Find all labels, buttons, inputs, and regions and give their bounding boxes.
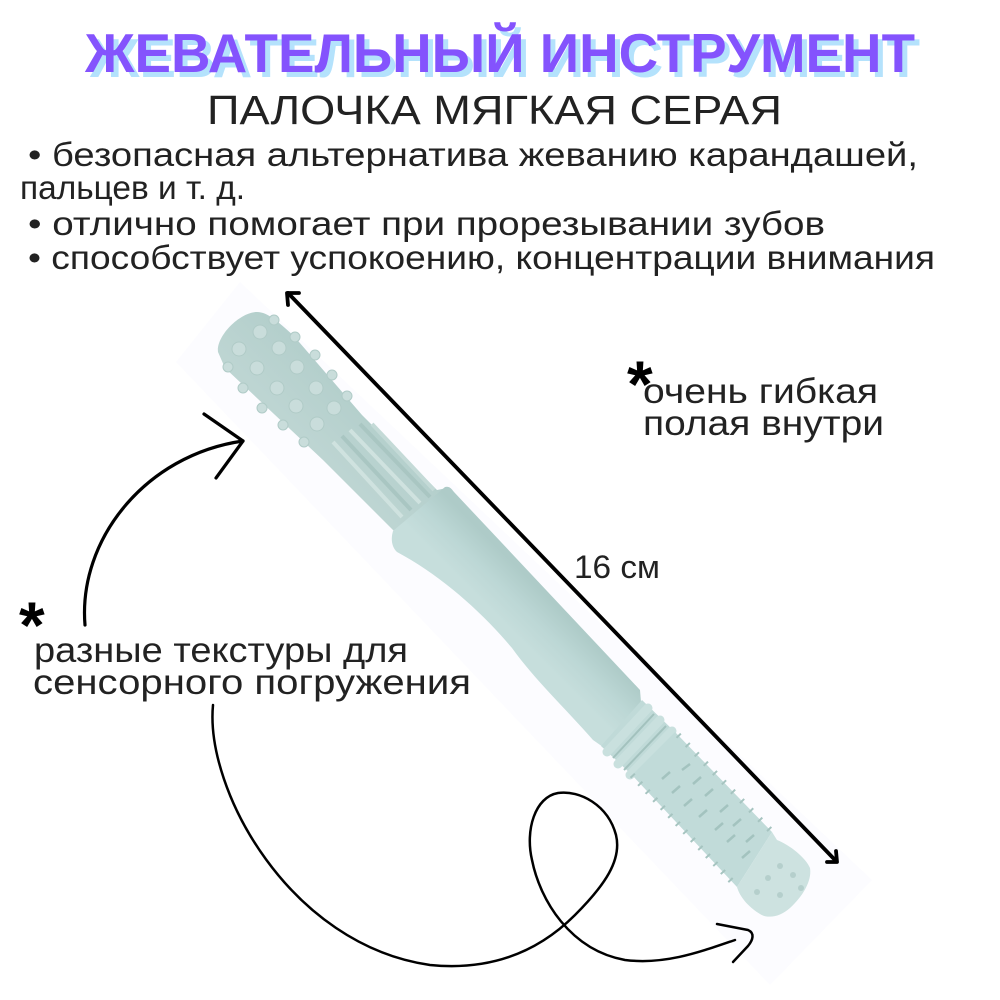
stick: bumpy section xyxy=(632,732,775,887)
text block: benefits: • отлично помогает при прорезывании зубов xyxy=(28,205,825,242)
arrow: curved to head xyxy=(84,414,243,625)
arrow: looped to tip xyxy=(212,705,753,966)
stick: ribs xyxy=(333,424,434,517)
label: length: 16 см xyxy=(574,549,660,585)
callout: textures: * xyxy=(19,588,45,662)
arrow: 16 cm dimension xyxy=(287,293,837,862)
stick: textured head and ribbed section xyxy=(218,312,447,535)
callout: textures: разные текстуры для xyxy=(34,631,408,670)
text block: benefits xyxy=(20,136,935,276)
text block: benefits: • способствует успокоению, концентрации внимания xyxy=(28,239,935,276)
callout: flexible and hollow: полая внутри xyxy=(643,404,884,443)
callout: flexible and hollow: очень гибкая xyxy=(643,372,878,411)
callout: textures xyxy=(19,588,471,702)
callout: flexible and hollow: * xyxy=(627,347,653,421)
stick: head bumps xyxy=(223,315,352,447)
text block: benefits: • безопасная альтернатива жеванию карандашей, xyxy=(28,136,918,173)
stick: rings xyxy=(601,700,675,775)
callout: textures: сенсорного погружения xyxy=(33,663,471,702)
chew stick product xyxy=(218,312,810,917)
text block: benefits: пальцев и т. д. xyxy=(20,169,245,206)
stick: smooth handle xyxy=(392,487,641,747)
callout: flexible and hollow xyxy=(627,347,884,443)
stick: rounded tip xyxy=(737,832,810,917)
title: ЖЕВАТЕЛЬНЫЙ ИНСТРУМЕНТ xyxy=(84,21,915,84)
subtitle: ПАЛОЧКА МЯГКАЯ СЕРАЯ xyxy=(207,87,782,133)
title: ЖЕВАТЕЛЬНЫЙ ИНСТРУМЕНТ xyxy=(89,26,920,89)
